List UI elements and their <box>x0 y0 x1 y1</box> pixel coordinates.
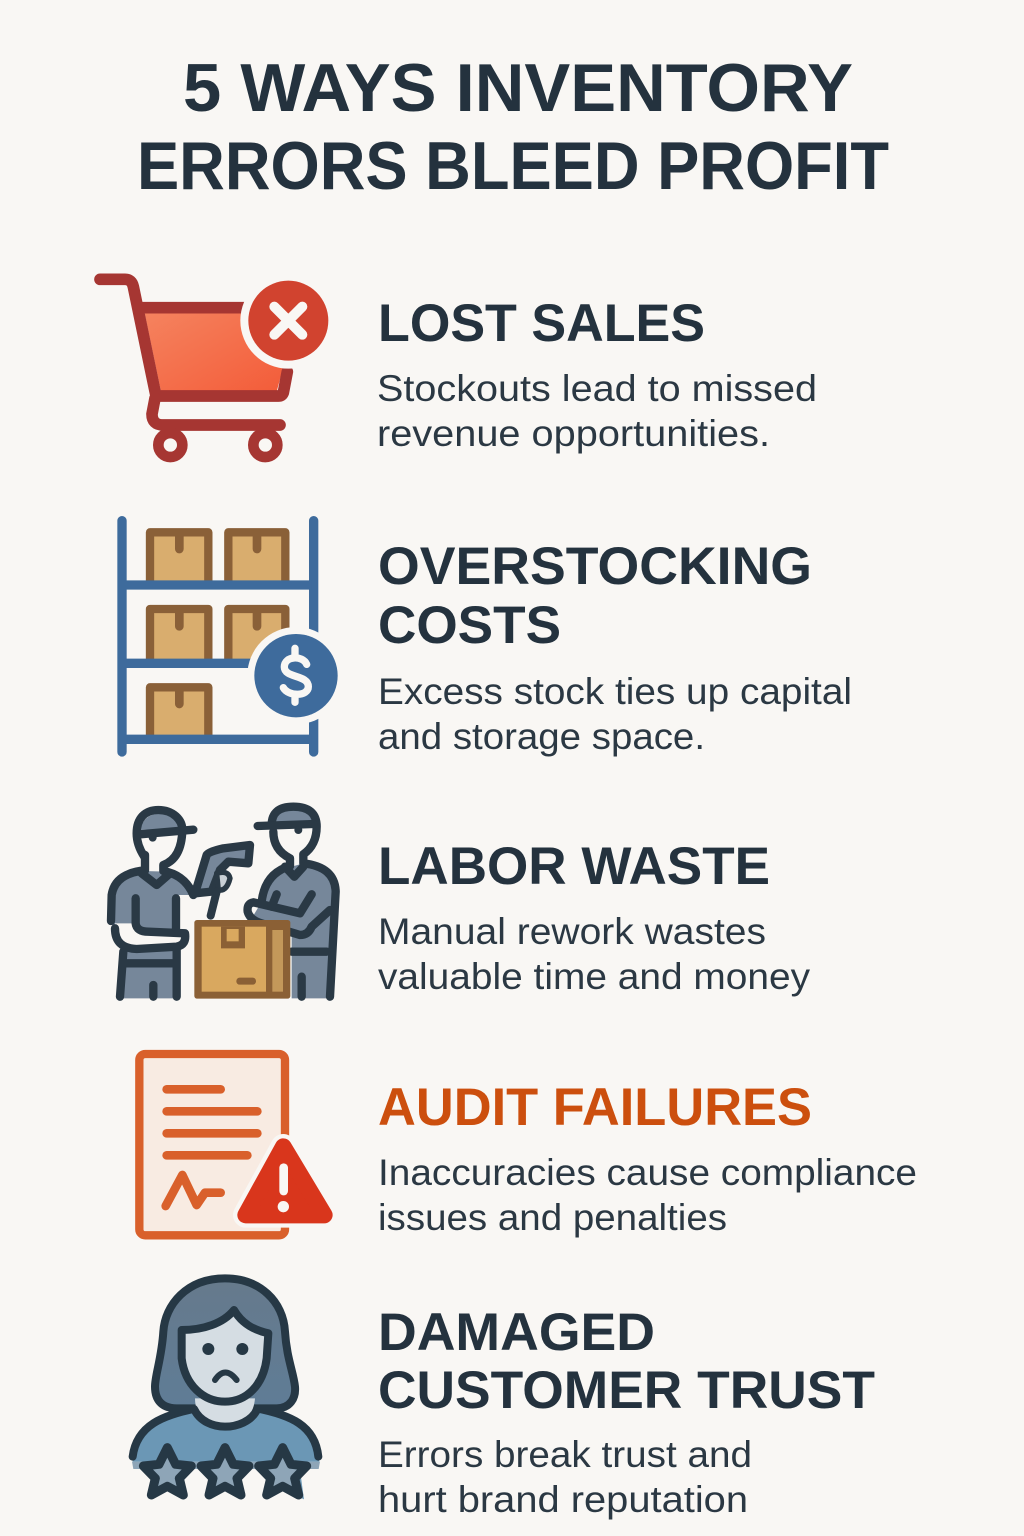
text: customer trust description <box>378 1434 752 1520</box>
heading: lost sales: LOST SALES <box>378 294 705 353</box>
text: lost sales description: Stockouts lead to missed <box>377 368 817 409</box>
text: customer trust description: hurt brand reputation <box>378 1479 748 1520</box>
icon: audit document with warning <box>139 1054 324 1235</box>
title: ERRORS BLEED PROFIT <box>137 128 889 204</box>
text: lost sales description: revenue opportunities. <box>377 413 770 454</box>
heading: overstocking costs <box>378 537 812 655</box>
worker right <box>252 863 336 998</box>
icon: warehouse shelf with dollar badge <box>122 521 345 752</box>
heading: damaged customer trust: CUSTOMER TRUST <box>378 1361 875 1420</box>
text: audit failures description: issues and penalties <box>378 1197 727 1238</box>
text: labor waste description: Manual rework wastes <box>378 911 766 952</box>
heading: overstocking costs: COSTS <box>378 596 561 655</box>
icon: two workers scanning a box <box>111 807 336 999</box>
icon: unhappy customer with stars <box>132 1278 320 1499</box>
heading: labor waste: LABOR WASTE <box>378 837 770 896</box>
heading: damaged customer trust <box>378 1303 875 1420</box>
text: overstocking description: Excess stock ties up capital <box>378 671 852 712</box>
title: 5 WAYS INVENTORY <box>183 50 853 126</box>
box <box>194 920 290 999</box>
text: audit failures description <box>378 1152 917 1238</box>
heading: audit failures: AUDIT FAILURES <box>378 1078 812 1137</box>
icon: shopping cart with error badge <box>100 273 336 457</box>
text: overstocking description: and storage space. <box>378 716 705 757</box>
text: customer trust description: Errors break trust and <box>378 1434 752 1475</box>
text: audit failures description: Inaccuracies cause compliance <box>378 1152 917 1193</box>
worker left <box>111 871 193 998</box>
heading: overstocking costs: OVERSTOCKING <box>378 537 812 596</box>
title <box>137 50 889 204</box>
heading: damaged customer trust: DAMAGED <box>378 1303 655 1362</box>
text: overstocking description <box>378 671 852 757</box>
text: labor waste description: valuable time and money <box>378 956 811 997</box>
scanner <box>195 845 250 893</box>
text: labor waste description <box>378 911 811 997</box>
text: lost sales description <box>377 368 817 454</box>
